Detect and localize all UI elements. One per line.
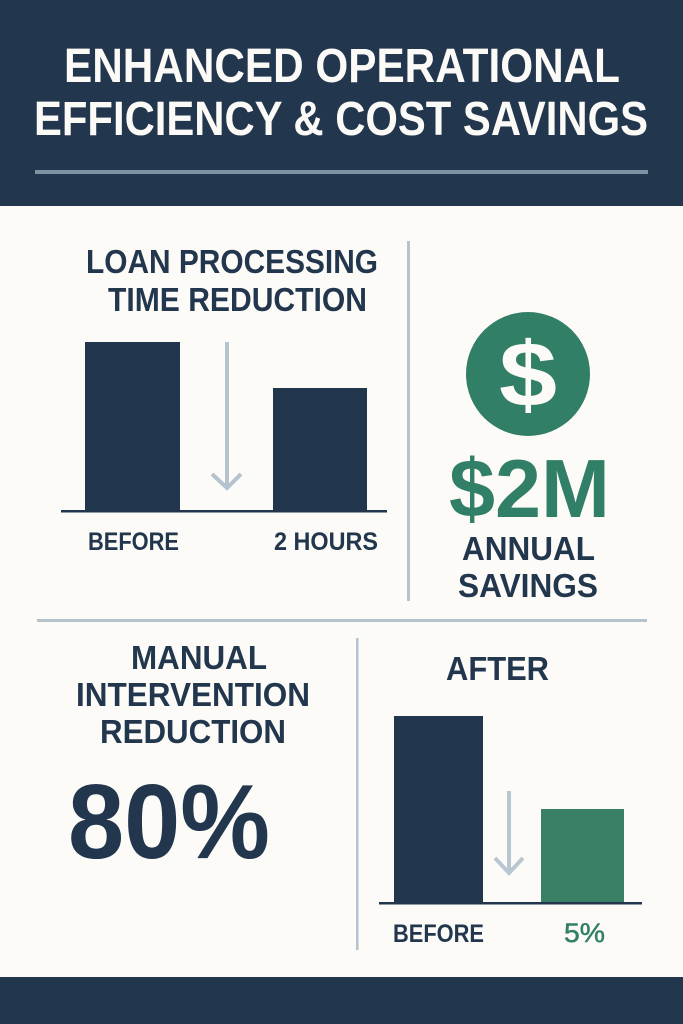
caption: annual savings	[458, 530, 598, 604]
heading: loan processing	[86, 243, 378, 318]
heading: manual intervention reduction	[76, 639, 310, 750]
stat: 80%: 80%	[68, 763, 270, 881]
panel: after chart	[379, 650, 642, 948]
heading: manual intervention reduction: INTERVENTION	[76, 676, 310, 713]
title: ENHANCED OPERATIONAL	[64, 40, 620, 93]
label: before: BEFORE	[393, 920, 484, 948]
header band	[0, 0, 683, 206]
heading: loan processing: LOAN PROCESSING	[86, 243, 378, 280]
icon: dollar coin	[466, 312, 590, 436]
label: before: BEFORE	[88, 528, 179, 556]
icon: dollar coin: $	[499, 324, 557, 426]
panel: annual savings	[449, 312, 610, 604]
title	[34, 40, 648, 146]
caption: annual savings: ANNUAL	[462, 530, 595, 567]
bar chart: loan processing time	[61, 342, 387, 556]
label: 2 hours: 2 HOURS	[274, 528, 378, 556]
footer band	[0, 977, 683, 1024]
heading: after: AFTER	[446, 650, 549, 687]
heading: loan processing: TIME REDUCTION	[108, 281, 367, 318]
label: 5%: 5%	[564, 918, 605, 948]
heading: manual intervention reduction: REDUCTION	[100, 713, 286, 750]
caption: annual savings: SAVINGS	[458, 567, 598, 604]
arrow: downward reduction	[495, 791, 523, 873]
panel: loan processing time reduction	[61, 243, 387, 556]
stat: $2M: $2M	[449, 442, 610, 535]
panel: manual intervention reduction	[68, 639, 310, 881]
heading: manual intervention reduction: MANUAL	[131, 639, 267, 676]
bar chart: manual intervention	[379, 716, 642, 948]
arrow: downward reduction	[212, 342, 241, 488]
